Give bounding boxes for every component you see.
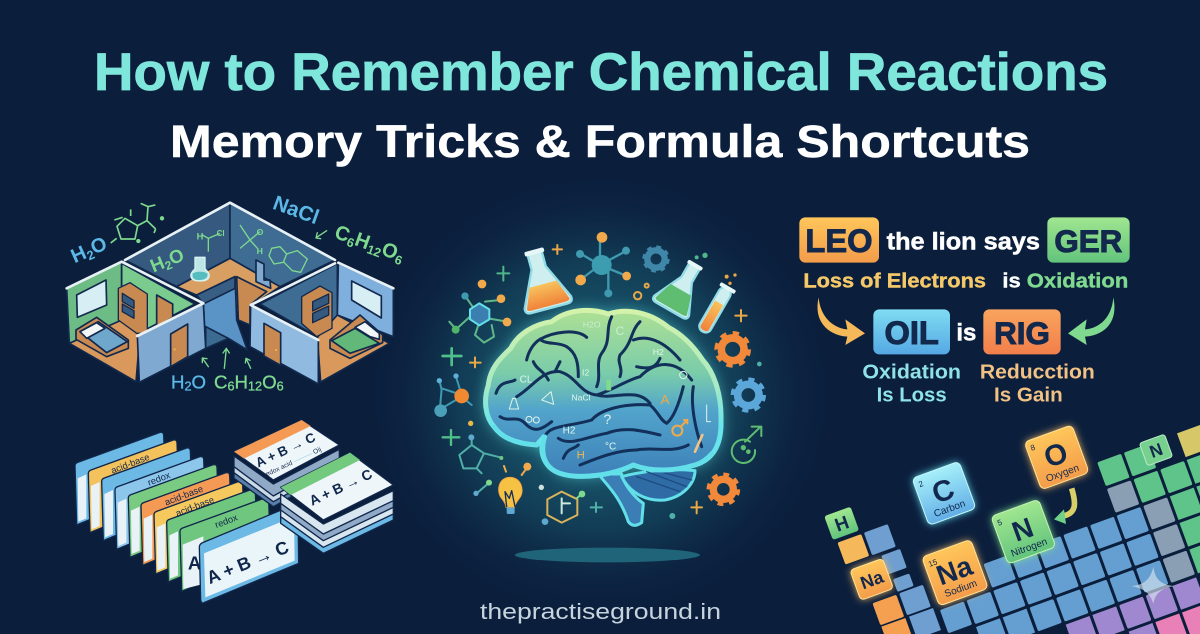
temporal lobe rim bbox=[543, 437, 712, 476]
bottom C6H12O6 formula: 6 bbox=[227, 379, 235, 393]
brain labels: ? bbox=[603, 411, 611, 427]
right bookshelf bbox=[302, 286, 332, 337]
right curved arrow bbox=[1068, 297, 1114, 345]
H cell: H bbox=[832, 511, 852, 536]
brain labels: C bbox=[616, 324, 625, 338]
lower left molecule bbox=[434, 373, 472, 417]
shadow ellipse bbox=[515, 548, 700, 562]
bottom C6H12O6 formula: H bbox=[235, 371, 248, 392]
tab labels: acid-base bbox=[174, 495, 216, 518]
white wall tops bbox=[67, 203, 393, 340]
tab labels: acid-base bbox=[110, 452, 151, 476]
is Oxidation: is Oxidation bbox=[1002, 271, 1128, 293]
is: is bbox=[956, 320, 976, 347]
olive table cell bbox=[1177, 425, 1200, 457]
panel: LEO GER OIL RIG mnemonic bbox=[799, 217, 1130, 407]
sparkle watermark bbox=[1132, 567, 1174, 604]
room wall labels: Cl bbox=[217, 229, 225, 238]
left curved arrow bbox=[817, 297, 865, 345]
Na Sodium card: Na bbox=[932, 550, 977, 591]
brain labels: H2O bbox=[583, 319, 601, 329]
brain glyph icons bbox=[509, 371, 711, 452]
brain labels: NaCl bbox=[571, 392, 591, 402]
tab labels: acid-base bbox=[163, 484, 205, 507]
card deck bbox=[75, 432, 271, 591]
RIG badge bbox=[983, 309, 1061, 354]
brain labels: H2 bbox=[653, 347, 664, 357]
light bulb bbox=[473, 463, 531, 514]
C6H12O6 formula: 12 bbox=[365, 242, 383, 260]
panel: glowing brain with chemistry icons bbox=[434, 232, 764, 562]
left bookshelf bbox=[118, 283, 147, 333]
H2O formula: O bbox=[87, 233, 111, 259]
left molecule bbox=[449, 280, 511, 343]
C6H12O6 formula: C bbox=[332, 221, 353, 247]
ring molecule lower left bbox=[459, 434, 503, 473]
subtitle: Memory Tricks & Formula Shortcuts bbox=[170, 116, 1030, 167]
NaCl formula: NaCl bbox=[270, 191, 322, 229]
RIG badge: RIG bbox=[994, 316, 1050, 351]
room wall labels: H bbox=[257, 246, 263, 256]
GER badge: GER bbox=[1054, 224, 1122, 259]
gray table cells bbox=[1107, 480, 1195, 583]
test tube bbox=[695, 282, 736, 336]
Nitrogen card: 5 bbox=[996, 518, 1004, 528]
brain labels: CL bbox=[520, 375, 533, 386]
Reduction Is Gain bbox=[980, 361, 1095, 407]
bottom H2O formula: 2 bbox=[184, 379, 192, 393]
Oxygen card: 8 bbox=[1029, 443, 1037, 453]
blue table cells bbox=[940, 507, 1168, 634]
Loss of Electrons: Loss of Electrons bbox=[803, 271, 986, 293]
bottom H2O formula: O bbox=[192, 371, 206, 392]
Na Sodium card: 15 bbox=[927, 557, 939, 569]
tab labels: redox bbox=[146, 470, 172, 488]
Reduction Is Gain: Is Gain bbox=[994, 385, 1063, 407]
H2O wall formula: H bbox=[147, 252, 167, 276]
Nitrogen card bbox=[991, 499, 1056, 564]
cerebrum bbox=[486, 310, 721, 476]
brain labels: H2 bbox=[563, 425, 576, 436]
tab labels: redox bbox=[214, 512, 239, 530]
Carbon card: 2 bbox=[917, 479, 925, 489]
H2O formula: H bbox=[68, 242, 90, 268]
orange flask bbox=[510, 243, 573, 315]
brain labels: A bbox=[661, 392, 670, 407]
Carbon card: Carbon bbox=[932, 498, 967, 520]
LEO badge: LEO bbox=[805, 222, 873, 259]
bottom C6H12O6 formula: C bbox=[214, 371, 227, 392]
room wall labels: H bbox=[197, 231, 204, 241]
N cell: N bbox=[1147, 439, 1165, 462]
C6H12O6 formula: 6 bbox=[345, 235, 356, 251]
tab labels bbox=[110, 452, 239, 573]
top molecule bbox=[575, 232, 631, 297]
Oxygen card: O bbox=[1040, 436, 1072, 475]
right card stack orange: redox acid ——— Oij bbox=[263, 446, 323, 479]
sulci bbox=[496, 317, 702, 465]
panel: memory palace isometric rooms bbox=[67, 191, 407, 393]
brain labels: I2 bbox=[582, 367, 589, 377]
bottom C6H12O6 formula: 6 bbox=[277, 379, 284, 393]
panel: periodic table bbox=[824, 425, 1200, 634]
website address: thepractiseground.in bbox=[480, 599, 721, 624]
Oxygen card bbox=[1024, 425, 1089, 490]
right card stack green bbox=[281, 453, 393, 553]
H cell bbox=[824, 507, 859, 540]
OIL badge bbox=[873, 309, 950, 354]
Oxidation Is Loss: Oxidation bbox=[862, 361, 961, 383]
arrow oxygen to nitrogen bbox=[1059, 488, 1074, 517]
Carbon card: C bbox=[928, 472, 959, 510]
the lion says: the lion says bbox=[887, 228, 1040, 255]
right bed bbox=[330, 315, 383, 358]
flask on counter bbox=[191, 257, 209, 281]
Carbon card bbox=[912, 461, 976, 525]
back walls and central floor bbox=[125, 203, 335, 350]
wall molecules bbox=[202, 225, 307, 272]
C6H12O6 formula: 6 bbox=[393, 253, 404, 268]
gears bbox=[644, 247, 764, 504]
front card bbox=[199, 505, 299, 603]
arrow head bbox=[1054, 509, 1066, 524]
bottom C6H12O6 formula: 12 bbox=[248, 379, 262, 393]
green table cells bbox=[1097, 444, 1200, 573]
N cell bbox=[1139, 434, 1173, 466]
bottom hexagon molecule bbox=[542, 491, 585, 525]
Reduction Is Gain: Reducction bbox=[980, 361, 1095, 383]
bottom H2O formula: H bbox=[171, 371, 184, 392]
Na Sodium card: Sodium bbox=[943, 578, 979, 600]
brain labels bbox=[520, 319, 670, 462]
H2O wall formula: O bbox=[166, 244, 187, 269]
right room walls and floor bbox=[260, 263, 393, 382]
growth icon bbox=[732, 427, 761, 463]
small arrows bbox=[202, 231, 327, 368]
front right wall with door bbox=[250, 305, 318, 384]
Oxidation Is Loss bbox=[862, 361, 961, 407]
right card stack orange: A + B → C bbox=[253, 429, 318, 470]
front left wall with door bbox=[137, 303, 206, 382]
Nitrogen card: Nitrogen bbox=[1010, 536, 1049, 560]
Nitrogen card: N bbox=[1008, 512, 1037, 548]
H2O formula: 2 bbox=[85, 248, 97, 263]
room wall labels: O bbox=[257, 227, 264, 237]
molecule top left bbox=[111, 203, 163, 243]
sparkles and dots bbox=[443, 245, 762, 519]
C6H12O6 formula: H bbox=[352, 229, 373, 254]
Oxidation Is Loss: Is Loss bbox=[877, 385, 947, 407]
bottom C6H12O6 formula: O bbox=[262, 371, 277, 392]
tab labels: A bbox=[188, 552, 201, 573]
left room: green walls and floor bbox=[67, 262, 195, 382]
front card: A + B → C bbox=[204, 537, 292, 588]
brain labels: H bbox=[577, 450, 585, 462]
LEO badge bbox=[799, 217, 879, 263]
GER badge bbox=[1047, 217, 1130, 263]
OIL badge: OIL bbox=[884, 314, 939, 351]
Na small card: Na bbox=[858, 566, 887, 593]
purple table cells bbox=[1066, 577, 1200, 634]
right card stack green: A + B → C bbox=[307, 466, 375, 509]
Oxygen card: Oxygen bbox=[1045, 463, 1081, 485]
brain labels: °C bbox=[605, 441, 616, 452]
left columns bbox=[837, 524, 941, 634]
C6H12O6 formula: O bbox=[379, 238, 401, 264]
Na Sodium card bbox=[922, 539, 988, 606]
title: How to Remember Chemical Reactions bbox=[94, 43, 1108, 102]
room wall labels bbox=[197, 227, 264, 256]
pink table cells bbox=[1155, 606, 1200, 634]
Na small card bbox=[850, 558, 893, 600]
right card stack orange bbox=[234, 420, 339, 507]
panel: flashcards bbox=[75, 420, 393, 603]
cerebellum and brainstem bbox=[598, 470, 695, 525]
left bed bbox=[76, 317, 128, 357]
green flask bbox=[652, 253, 713, 320]
brain glow bbox=[486, 310, 721, 476]
H2O wall formula: 2 bbox=[163, 258, 175, 273]
